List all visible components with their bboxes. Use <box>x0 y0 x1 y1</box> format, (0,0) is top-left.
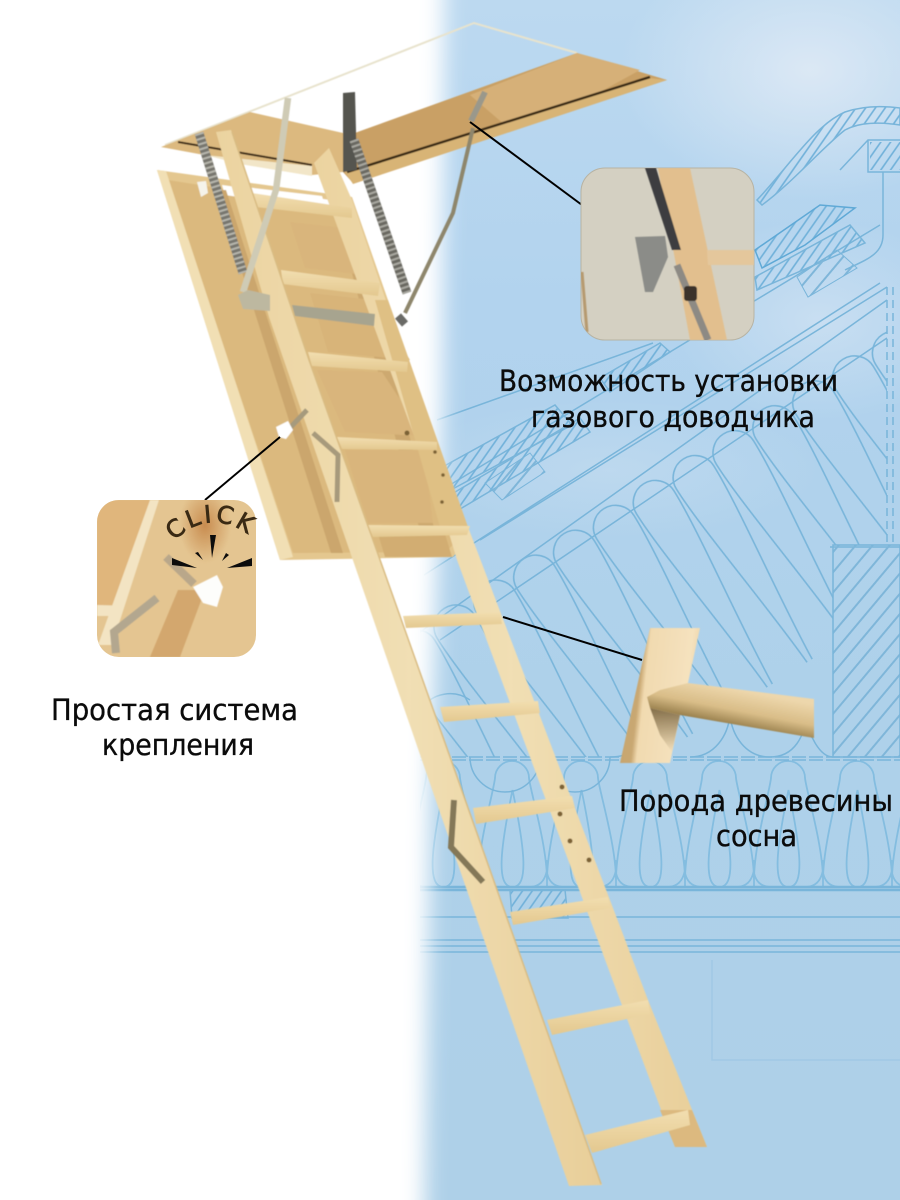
blueprint: insulation scallops above beam <box>415 694 833 792</box>
wood rung <box>647 683 814 738</box>
inset dark rod <box>645 168 681 250</box>
inset mount plate <box>635 236 668 292</box>
inset left edge <box>582 272 587 332</box>
label: wood species <box>619 784 893 853</box>
inset orange shading <box>182 500 228 558</box>
inset light crossbar <box>97 604 112 616</box>
attic frame: left beam <box>161 112 343 176</box>
wood rail <box>620 628 700 763</box>
label: simple fastening: Простая система <box>51 693 298 727</box>
gas strut spring right <box>354 140 407 293</box>
small latch on panel top <box>197 181 208 197</box>
rungs <box>252 193 690 1153</box>
right rail shaded inner edge <box>660 1110 707 1147</box>
attic opening edge line <box>165 23 577 145</box>
inset rung <box>707 250 754 265</box>
bracket on panel <box>238 290 375 326</box>
metal bracket of gas strut <box>343 92 357 172</box>
inset lower strap <box>114 598 157 653</box>
label: simple fastening <box>51 693 298 762</box>
hatch panel <box>157 170 470 560</box>
inset: click latch <box>97 500 258 657</box>
click caption: CLICK <box>166 504 258 538</box>
label: simple fastening: крепления <box>102 728 254 762</box>
label: wood species: сосна <box>716 819 797 853</box>
blueprint: horizontal beam lines <box>418 757 900 760</box>
staircase with hatch, frame and fittings <box>157 23 707 1186</box>
wood rail shadow below rung <box>650 708 680 752</box>
inset: gas closer <box>581 168 754 340</box>
label: gas closer <box>499 364 838 434</box>
latch on panel <box>276 410 307 439</box>
blueprint: hatched rafter block <box>833 545 900 757</box>
inset: wood sample <box>620 628 814 763</box>
inset vertical band <box>150 590 205 657</box>
folding strap left <box>243 98 288 292</box>
folding arm right <box>398 92 485 324</box>
right rail <box>314 148 707 1147</box>
inset light stripe <box>98 500 159 645</box>
click rays <box>172 535 252 568</box>
attic frame: right beam <box>343 53 667 184</box>
blueprint: hatched roof battens <box>437 405 572 492</box>
inset strap <box>166 557 194 584</box>
callout line to wood sample <box>503 617 642 660</box>
inset thread <box>677 265 708 340</box>
left rail edge highlight <box>232 132 601 1184</box>
label: gas closer: газового доводчика <box>531 400 815 434</box>
callout line to latch inset <box>205 437 280 500</box>
right rail: upper tan face <box>375 300 468 527</box>
inset darker left block <box>97 500 150 605</box>
label: gas closer: Возможность установки <box>499 364 838 398</box>
blueprint: roof slope lines <box>420 225 887 640</box>
inset white latch <box>193 575 223 607</box>
Y bracket on panel <box>313 433 338 502</box>
blueprint roof section drawing <box>415 107 900 1060</box>
callout line to gas closer inset <box>470 122 582 205</box>
left rail <box>216 130 602 1186</box>
white left area with soft fade into the blue <box>0 0 444 1200</box>
blueprint: curved ridge tile <box>757 107 900 205</box>
gas strut spring left <box>199 133 243 273</box>
blueprint: sloped insulation <box>420 300 887 757</box>
inset knob <box>684 286 697 301</box>
hinge on lower ladder <box>451 800 483 882</box>
inset beam <box>658 168 727 340</box>
blueprint: horizontal insulation row <box>418 760 900 887</box>
bolts <box>404 430 592 862</box>
